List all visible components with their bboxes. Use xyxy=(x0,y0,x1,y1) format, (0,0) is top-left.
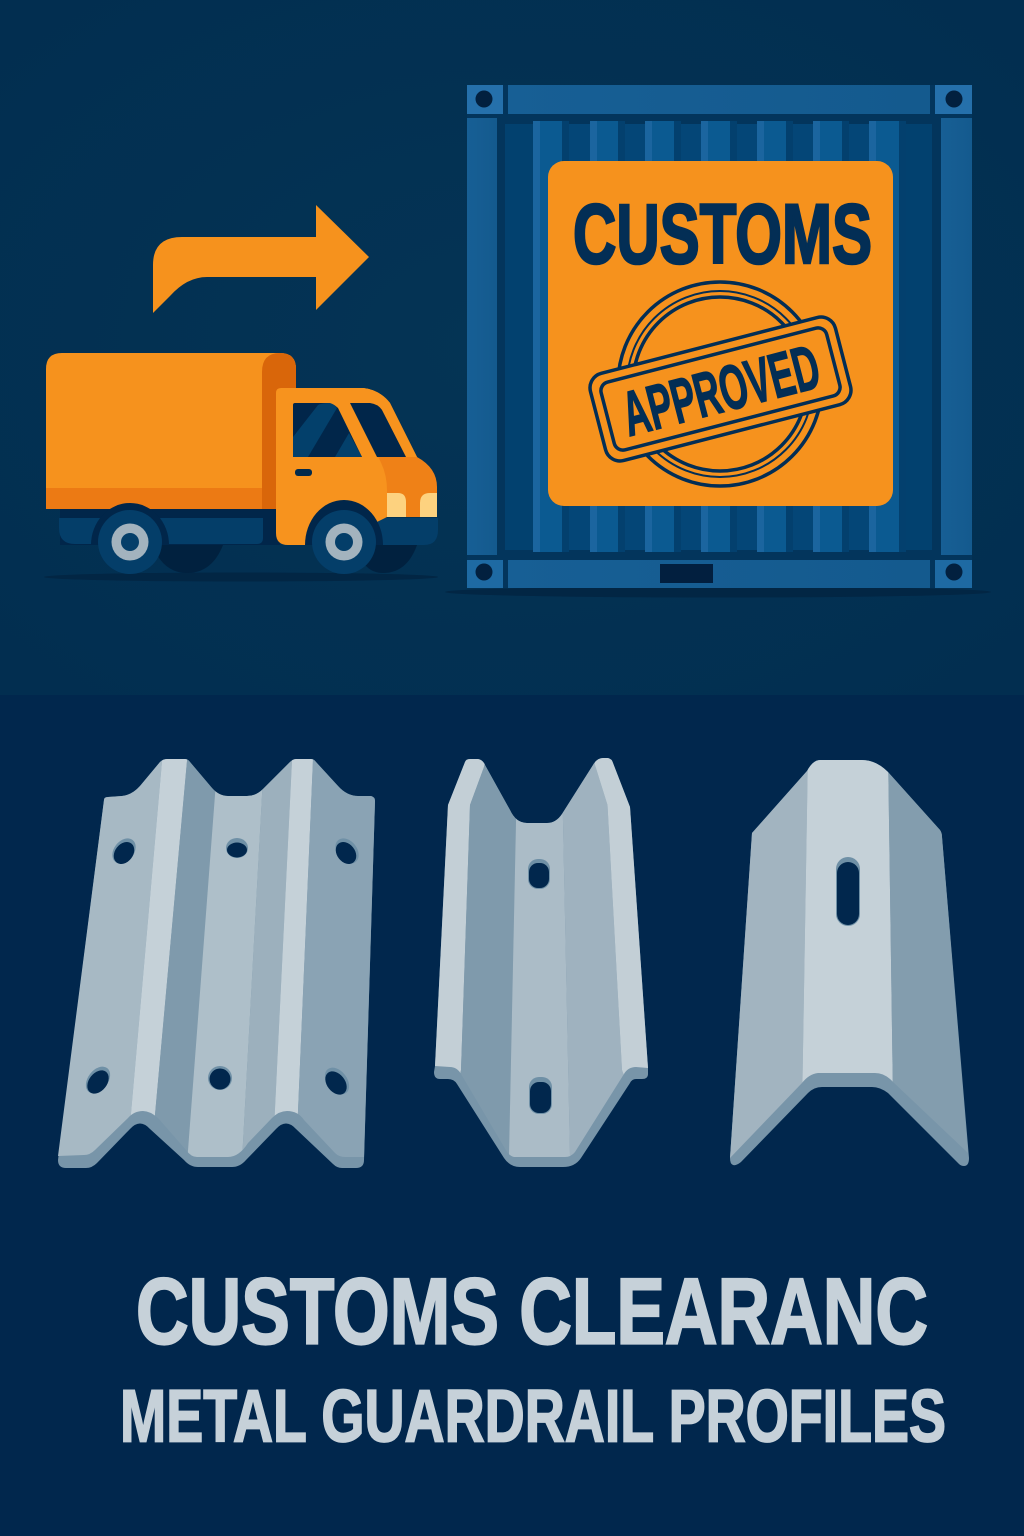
mounting holes xyxy=(81,834,363,1099)
door handle xyxy=(295,469,312,476)
container back panel xyxy=(467,85,972,588)
cargo box xyxy=(46,353,296,509)
wheel shadows xyxy=(157,545,417,573)
slot xyxy=(836,857,860,926)
ground shadow xyxy=(44,572,438,582)
wheel arches xyxy=(91,500,383,545)
facets xyxy=(50,750,380,1170)
panel: bottom background xyxy=(0,695,1024,1536)
sign heading: CUSTOMS xyxy=(573,187,872,281)
guardrail profile: channel with lips xyxy=(430,750,660,1170)
approved stamp xyxy=(587,282,854,486)
facets xyxy=(725,750,975,1170)
facets xyxy=(435,758,648,1157)
front wheel xyxy=(312,510,376,574)
guardrail profile: W-beam xyxy=(50,750,380,1170)
channel body xyxy=(434,758,648,1167)
right post xyxy=(941,118,972,555)
stamp band xyxy=(587,314,854,464)
bottom rail xyxy=(508,560,930,588)
arrow xyxy=(153,205,369,313)
rear wheel xyxy=(98,510,162,574)
panel: top background xyxy=(0,0,1024,695)
beam body xyxy=(58,759,375,1168)
stamp rings xyxy=(618,282,822,486)
corrugation ribs xyxy=(505,121,932,552)
bottom hatch xyxy=(660,564,713,583)
cab xyxy=(276,388,437,545)
left post xyxy=(467,118,497,555)
corner castings xyxy=(467,85,972,588)
icon: delivery truck xyxy=(44,353,438,582)
stamp band: APPROVED xyxy=(615,332,827,450)
customs sign xyxy=(548,161,893,506)
title xyxy=(120,1258,946,1458)
slots xyxy=(528,859,552,1114)
guardrail profile: hat section xyxy=(725,750,975,1170)
container shadow xyxy=(445,586,991,598)
icon: shipping container xyxy=(445,85,991,598)
chassis xyxy=(59,509,438,545)
section body xyxy=(730,760,969,1166)
top rail xyxy=(508,85,930,114)
windows xyxy=(293,403,406,457)
headlights xyxy=(387,493,437,517)
